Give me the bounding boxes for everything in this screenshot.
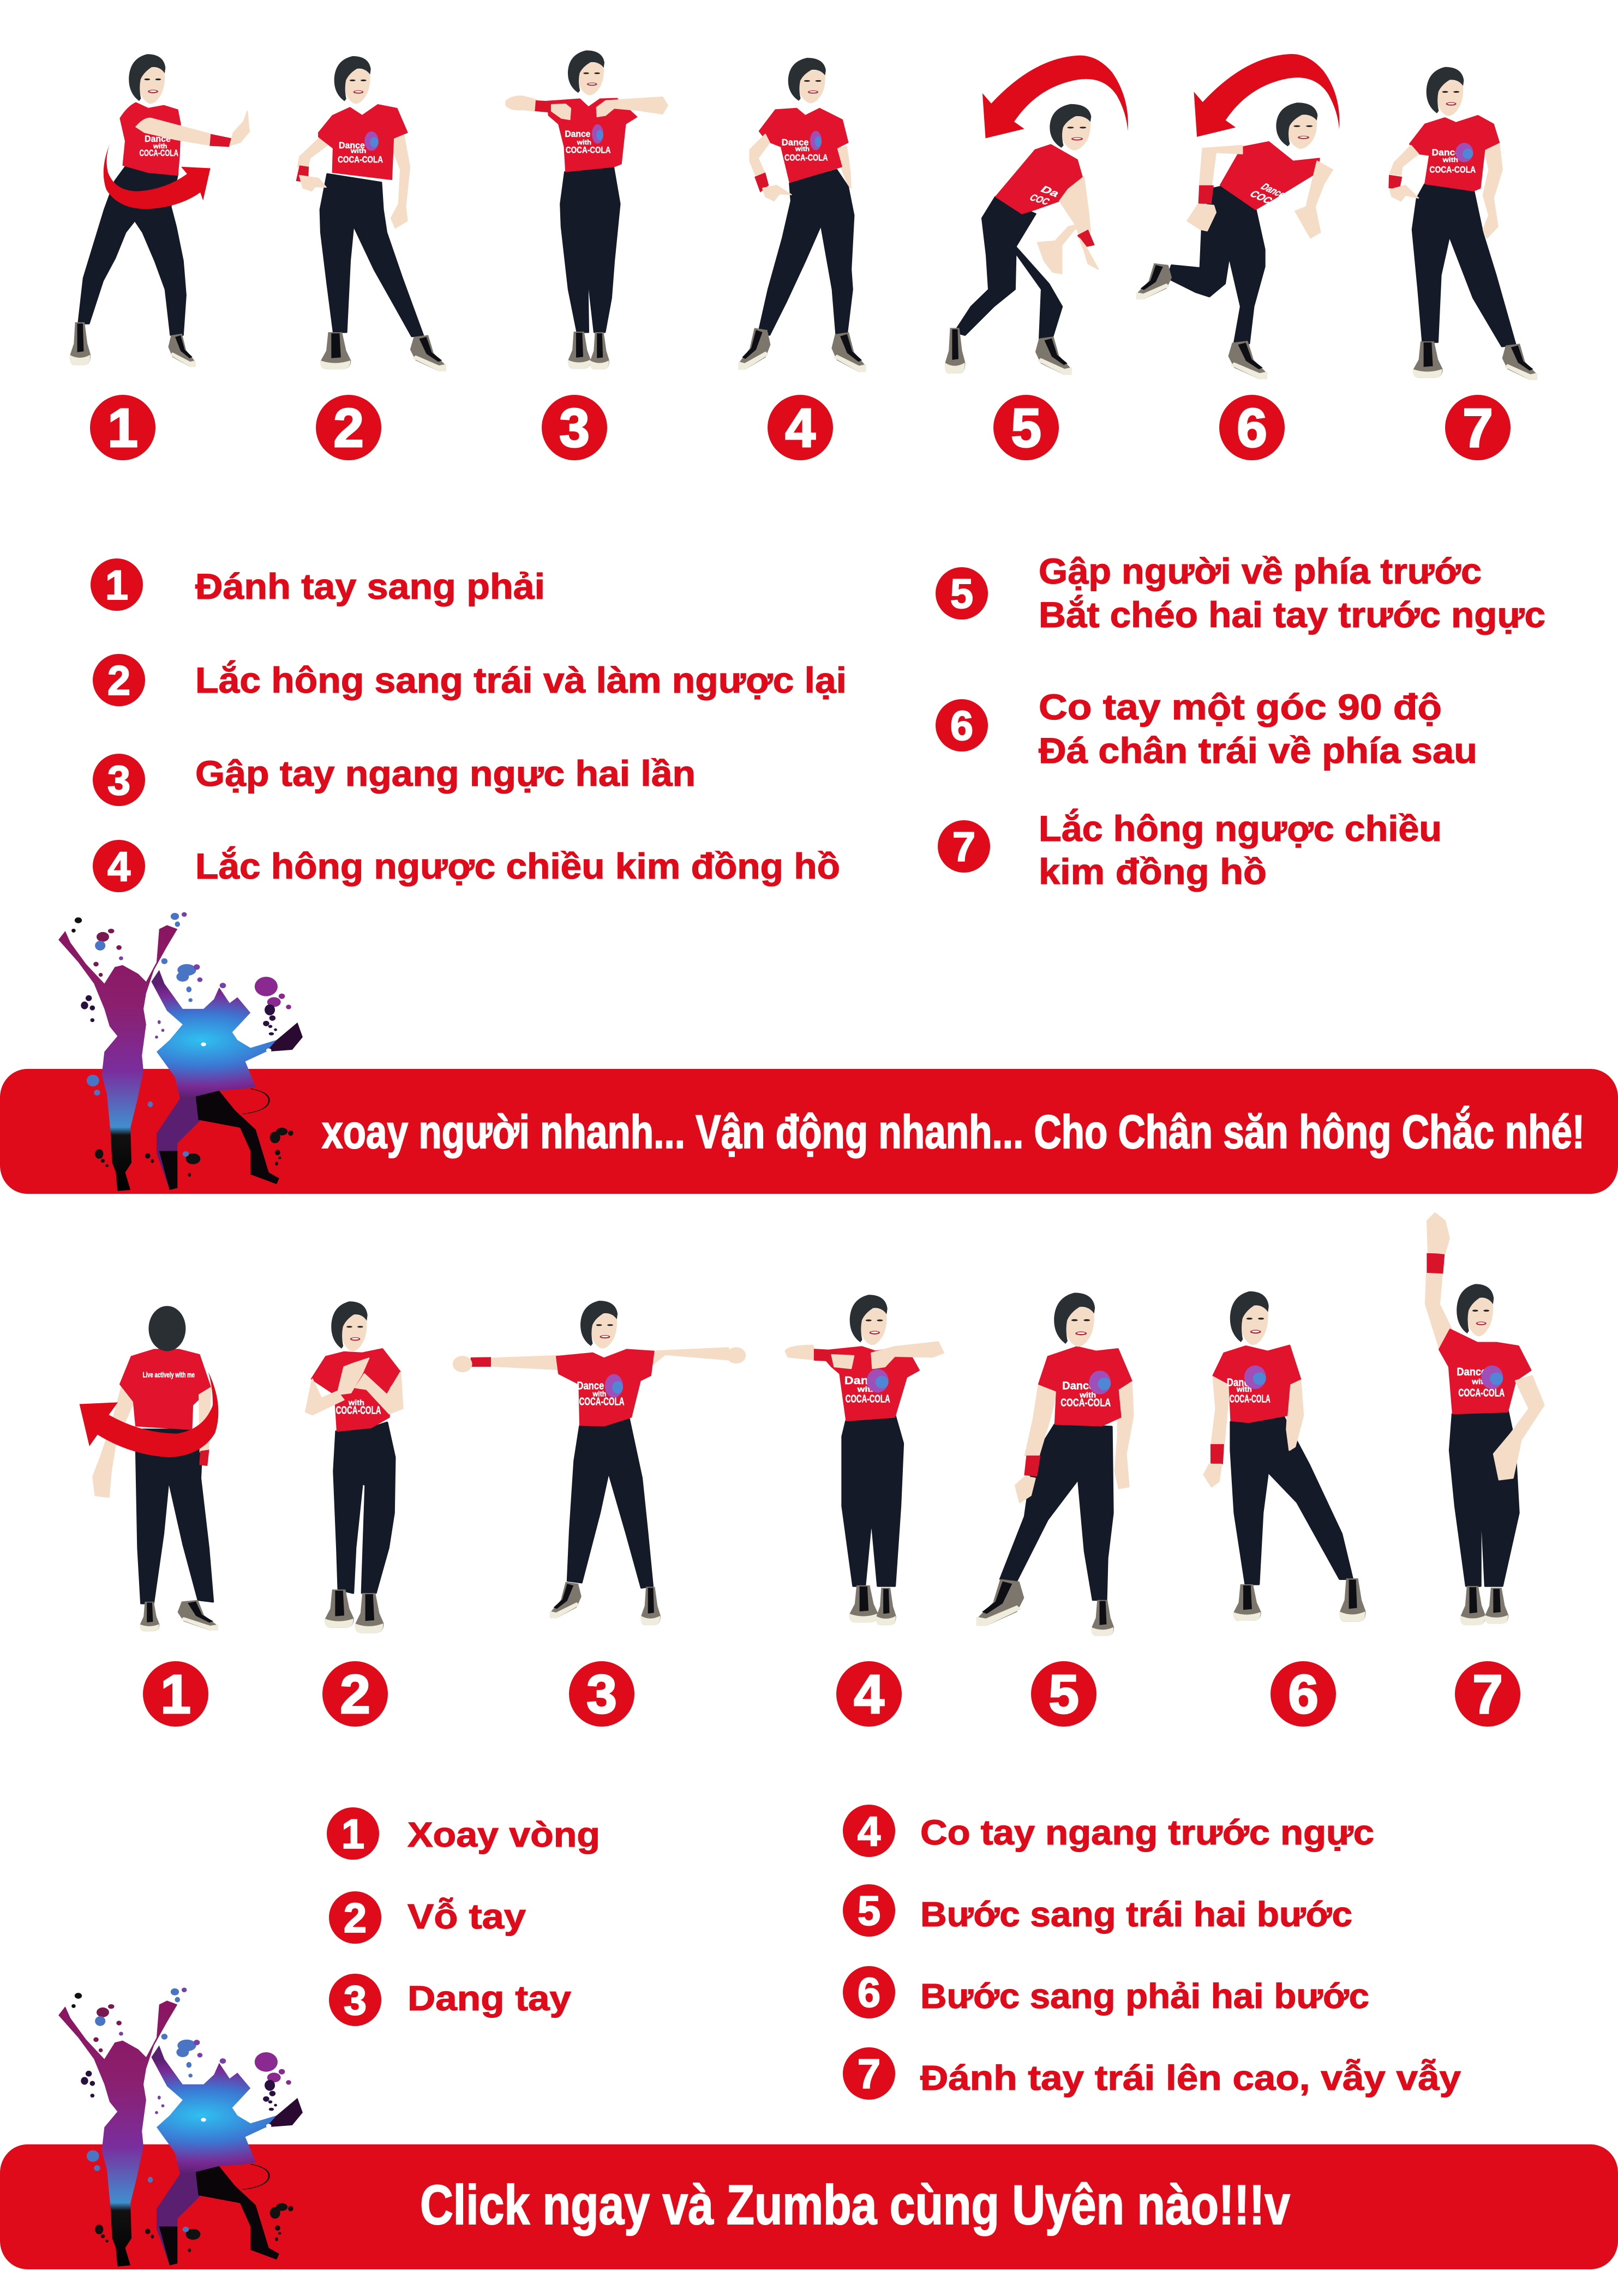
step number 7 (top row): 7: [1463, 398, 1493, 459]
lower list item 6: Bước sang phải hai bước: [920, 1976, 1369, 2016]
lower list item 5: Bước sang trái hai bước: [920, 1895, 1352, 1934]
arrow: curved over head: [982, 56, 1128, 139]
list item 6: [936, 687, 1477, 771]
lower list item 7: [843, 2047, 1461, 2100]
figure bottom 3: arms spread: COCA-COLA: [579, 1396, 625, 1408]
list item 7: [938, 808, 1442, 892]
list item 5: Bắt chéo hai tay trước ngực: [1039, 594, 1545, 635]
lower list item 2: [329, 1891, 526, 1944]
banner 1: [0, 1069, 1618, 1194]
figure top 4: hip sway counter clockwise: Dance: [782, 137, 808, 148]
figure bottom 7: left arm raised, waving: with: [1471, 1377, 1488, 1386]
step number 4 (top row): [768, 395, 833, 460]
figure bottom 4: arms across chest: Dance: [844, 1374, 883, 1387]
figure bottom 1: back view turn with arrow: Live actively with me: [143, 1371, 195, 1379]
figure bottom 2: clapping: COCA-COLA: [336, 1404, 381, 1417]
list item 5: [936, 551, 1545, 635]
step number 3 (bottom row): 3: [586, 1664, 617, 1725]
lower list item 4: Co tay ngang trước ngực: [920, 1813, 1374, 1852]
list item 3: Gập tay ngang ngực hai lần: [195, 753, 696, 794]
step number 5 (top row): [993, 395, 1059, 460]
step number 2 (bottom row): [322, 1661, 388, 1727]
figure top 6: kick back leg, arms bent: Dance: [1258, 181, 1289, 200]
figure top 1: punch right with hip arrow: with: [153, 142, 167, 150]
figure top 3: arms folded across chest: with: [577, 140, 591, 146]
lower list item 1: 1: [341, 1811, 364, 1858]
banner 2: [0, 2144, 1618, 2269]
arrow: turn around: [80, 1372, 218, 1457]
figure bottom 6: step right: Dance: [1227, 1376, 1254, 1389]
list item 3: [93, 753, 696, 806]
figure bottom 6: step right: [1204, 1291, 1366, 1622]
figure top 1: punch right with hip arrow: COCA-COLA: [139, 148, 178, 158]
step number 1 (top row): 1: [107, 398, 138, 459]
figure bottom 2: clapping: [305, 1301, 403, 1633]
arrow: curved over head: [1194, 54, 1339, 137]
figure bottom 3: arms spread: [453, 1301, 745, 1625]
list item 6: Đá chân trái về phía sau: [1039, 730, 1477, 771]
figure bottom 6: step right: with: [1236, 1385, 1252, 1393]
step number 2 (top row): 2: [333, 398, 364, 459]
step number 7 (bottom row): [1455, 1661, 1520, 1727]
step number 1 (top row): [90, 395, 155, 460]
figure top 1: punch right with hip arrow: Dance: [145, 134, 171, 143]
figure bottom 2: clapping: with: [348, 1398, 364, 1407]
step number 7 (top row): [1445, 395, 1511, 460]
step number 7 (bottom row): 7: [1472, 1664, 1503, 1725]
list item 7: 7: [952, 824, 975, 870]
list item 5: 5: [950, 571, 973, 617]
figure top 1: punch right with hip arrow: [70, 54, 250, 367]
list item 4: Lắc hông ngược chiều kim đồng hồ: [195, 846, 840, 886]
lower list item 3: Dang tay: [408, 1979, 571, 2018]
arrow: hip rotation right: [104, 144, 211, 209]
figure bottom 4: arms across chest: COCA-COLA: [846, 1392, 890, 1405]
list item 4: 4: [107, 844, 130, 890]
list item 1: Đánh tay sang phải: [195, 566, 545, 606]
figure top 5: bend forward, arms crossed: Da: [1038, 184, 1063, 199]
step number 3 (top row): 3: [559, 398, 590, 459]
figure top 7: hip sway: Dance: [1431, 147, 1460, 158]
lower list item 7: 7: [858, 2051, 880, 2097]
list item 1: 1: [105, 562, 128, 609]
list item 2: [93, 654, 847, 706]
lower list item 1: Xoay vòng: [408, 1815, 600, 1854]
figure bottom 5: step left: COCA-COLA: [1060, 1396, 1111, 1409]
step number 3 (bottom row): [569, 1661, 634, 1727]
list item 5: Gập người về phía trước: [1039, 551, 1482, 591]
lower list item 2: Vỗ tay: [408, 1897, 526, 1936]
figure bottom 7: left arm raised, waving: [1425, 1213, 1544, 1625]
lower list item 4: 4: [858, 1808, 880, 1855]
step number 5 (bottom row): 5: [1048, 1664, 1079, 1725]
figure top 2: hip sway: COCA-COLA: [338, 154, 383, 165]
lower list item 5: 5: [858, 1888, 880, 1934]
step number 4 (top row): 4: [785, 398, 816, 459]
lower list item 3: 3: [344, 1978, 367, 2024]
step number 6 (top row): 6: [1237, 398, 1267, 459]
figure top 4: hip sway counter clockwise: with: [795, 146, 810, 153]
lower list item 3: [329, 1974, 571, 2026]
lower list item 7: Đánh tay trái lên cao, vẫy vẫy: [920, 2058, 1461, 2097]
list item 6: Co tay một góc 90 độ: [1039, 687, 1442, 727]
step number 1 (bottom row): [143, 1661, 208, 1727]
figure bottom 5: step left: Dance: [1062, 1379, 1095, 1392]
step number 4 (bottom row): [836, 1661, 902, 1727]
figure top 4: hip sway counter clockwise: COCA-COLA: [784, 152, 828, 163]
figure bottom 4: arms across chest: with: [857, 1385, 877, 1393]
list item 7: kim đồng hồ: [1039, 851, 1267, 892]
figure top 2: hip sway: with: [350, 147, 367, 154]
figure bottom 1: back view turn with arrow: [80, 1306, 218, 1631]
list item 2: Lắc hông sang trái và làm ngược lại: [195, 660, 847, 700]
lower list item 6: 6: [858, 1970, 880, 2016]
step number 2 (top row): [316, 395, 381, 460]
list item 3: 3: [107, 758, 130, 804]
figure top 7: hip sway: [1388, 67, 1537, 380]
figure bottom 4: arms across chest: [786, 1295, 944, 1625]
figure top 3: arms folded across chest: COCA-COLA: [566, 145, 611, 155]
dancers silhouette 2: [58, 1987, 303, 2267]
figure bottom 6: step right: COCA-COLA: [1230, 1392, 1271, 1405]
step number 1 (bottom row): 1: [160, 1664, 191, 1725]
step number 4 (bottom row): 4: [854, 1664, 884, 1725]
lower list item 4: [843, 1805, 1374, 1857]
figure top 7: hip sway: with: [1442, 157, 1458, 164]
list item 2: 2: [107, 658, 130, 704]
figure top 2: hip sway: Dance: [339, 140, 365, 150]
figure top 3: arms folded across chest: [506, 50, 668, 369]
figure bottom 3: arms spread: with: [592, 1390, 606, 1398]
figure bottom 5: step left: with: [1079, 1390, 1096, 1399]
lower list item 2: 2: [344, 1895, 367, 1942]
lower list item 5: [843, 1884, 1352, 1937]
figure top 5: bend forward, arms crossed: [945, 56, 1128, 375]
figure bottom 7: left arm raised, waving: COCA-COLA: [1458, 1386, 1505, 1399]
step number 3 (top row): [542, 395, 607, 460]
dancers silhouette 1: [58, 912, 303, 1191]
step number 6 (top row): [1219, 395, 1285, 460]
figure bottom 3: arms spread: Dance: [577, 1380, 604, 1392]
figure top 2: hip sway: [296, 56, 446, 371]
figure top 4: hip sway counter clockwise: [738, 58, 866, 372]
list item 4: [93, 840, 840, 892]
figure top 6: kick back leg, arms bent: COCA: [1247, 189, 1282, 208]
step number 6 (bottom row): [1271, 1661, 1336, 1727]
step number 2 (bottom row): 2: [340, 1664, 370, 1725]
figure top 3: arms folded across chest: Dance: [565, 129, 590, 139]
list item 6: 6: [950, 703, 973, 749]
step number 5 (bottom row): [1031, 1661, 1096, 1727]
lower list item 1: [327, 1807, 600, 1860]
list item 7: Lắc hông ngược chiều: [1039, 808, 1442, 849]
step number 5 (top row): 5: [1011, 398, 1041, 459]
figure bottom 7: left arm raised, waving: Dance: [1457, 1366, 1487, 1378]
figure top 6: kick back leg, arms bent: [1136, 54, 1339, 379]
banner 2: Click ngay và Zumba cùng Uyên nào!!!v: [420, 2174, 1290, 2236]
step number 6 (bottom row): 6: [1288, 1664, 1319, 1725]
list item 1: [91, 558, 545, 611]
figure bottom 5: step left: [976, 1293, 1133, 1636]
figure top 5: bend forward, arms crossed: COC: [1027, 192, 1052, 207]
figure top 7: hip sway: COCA-COLA: [1429, 164, 1476, 175]
lower list item 6: [843, 1966, 1369, 2018]
